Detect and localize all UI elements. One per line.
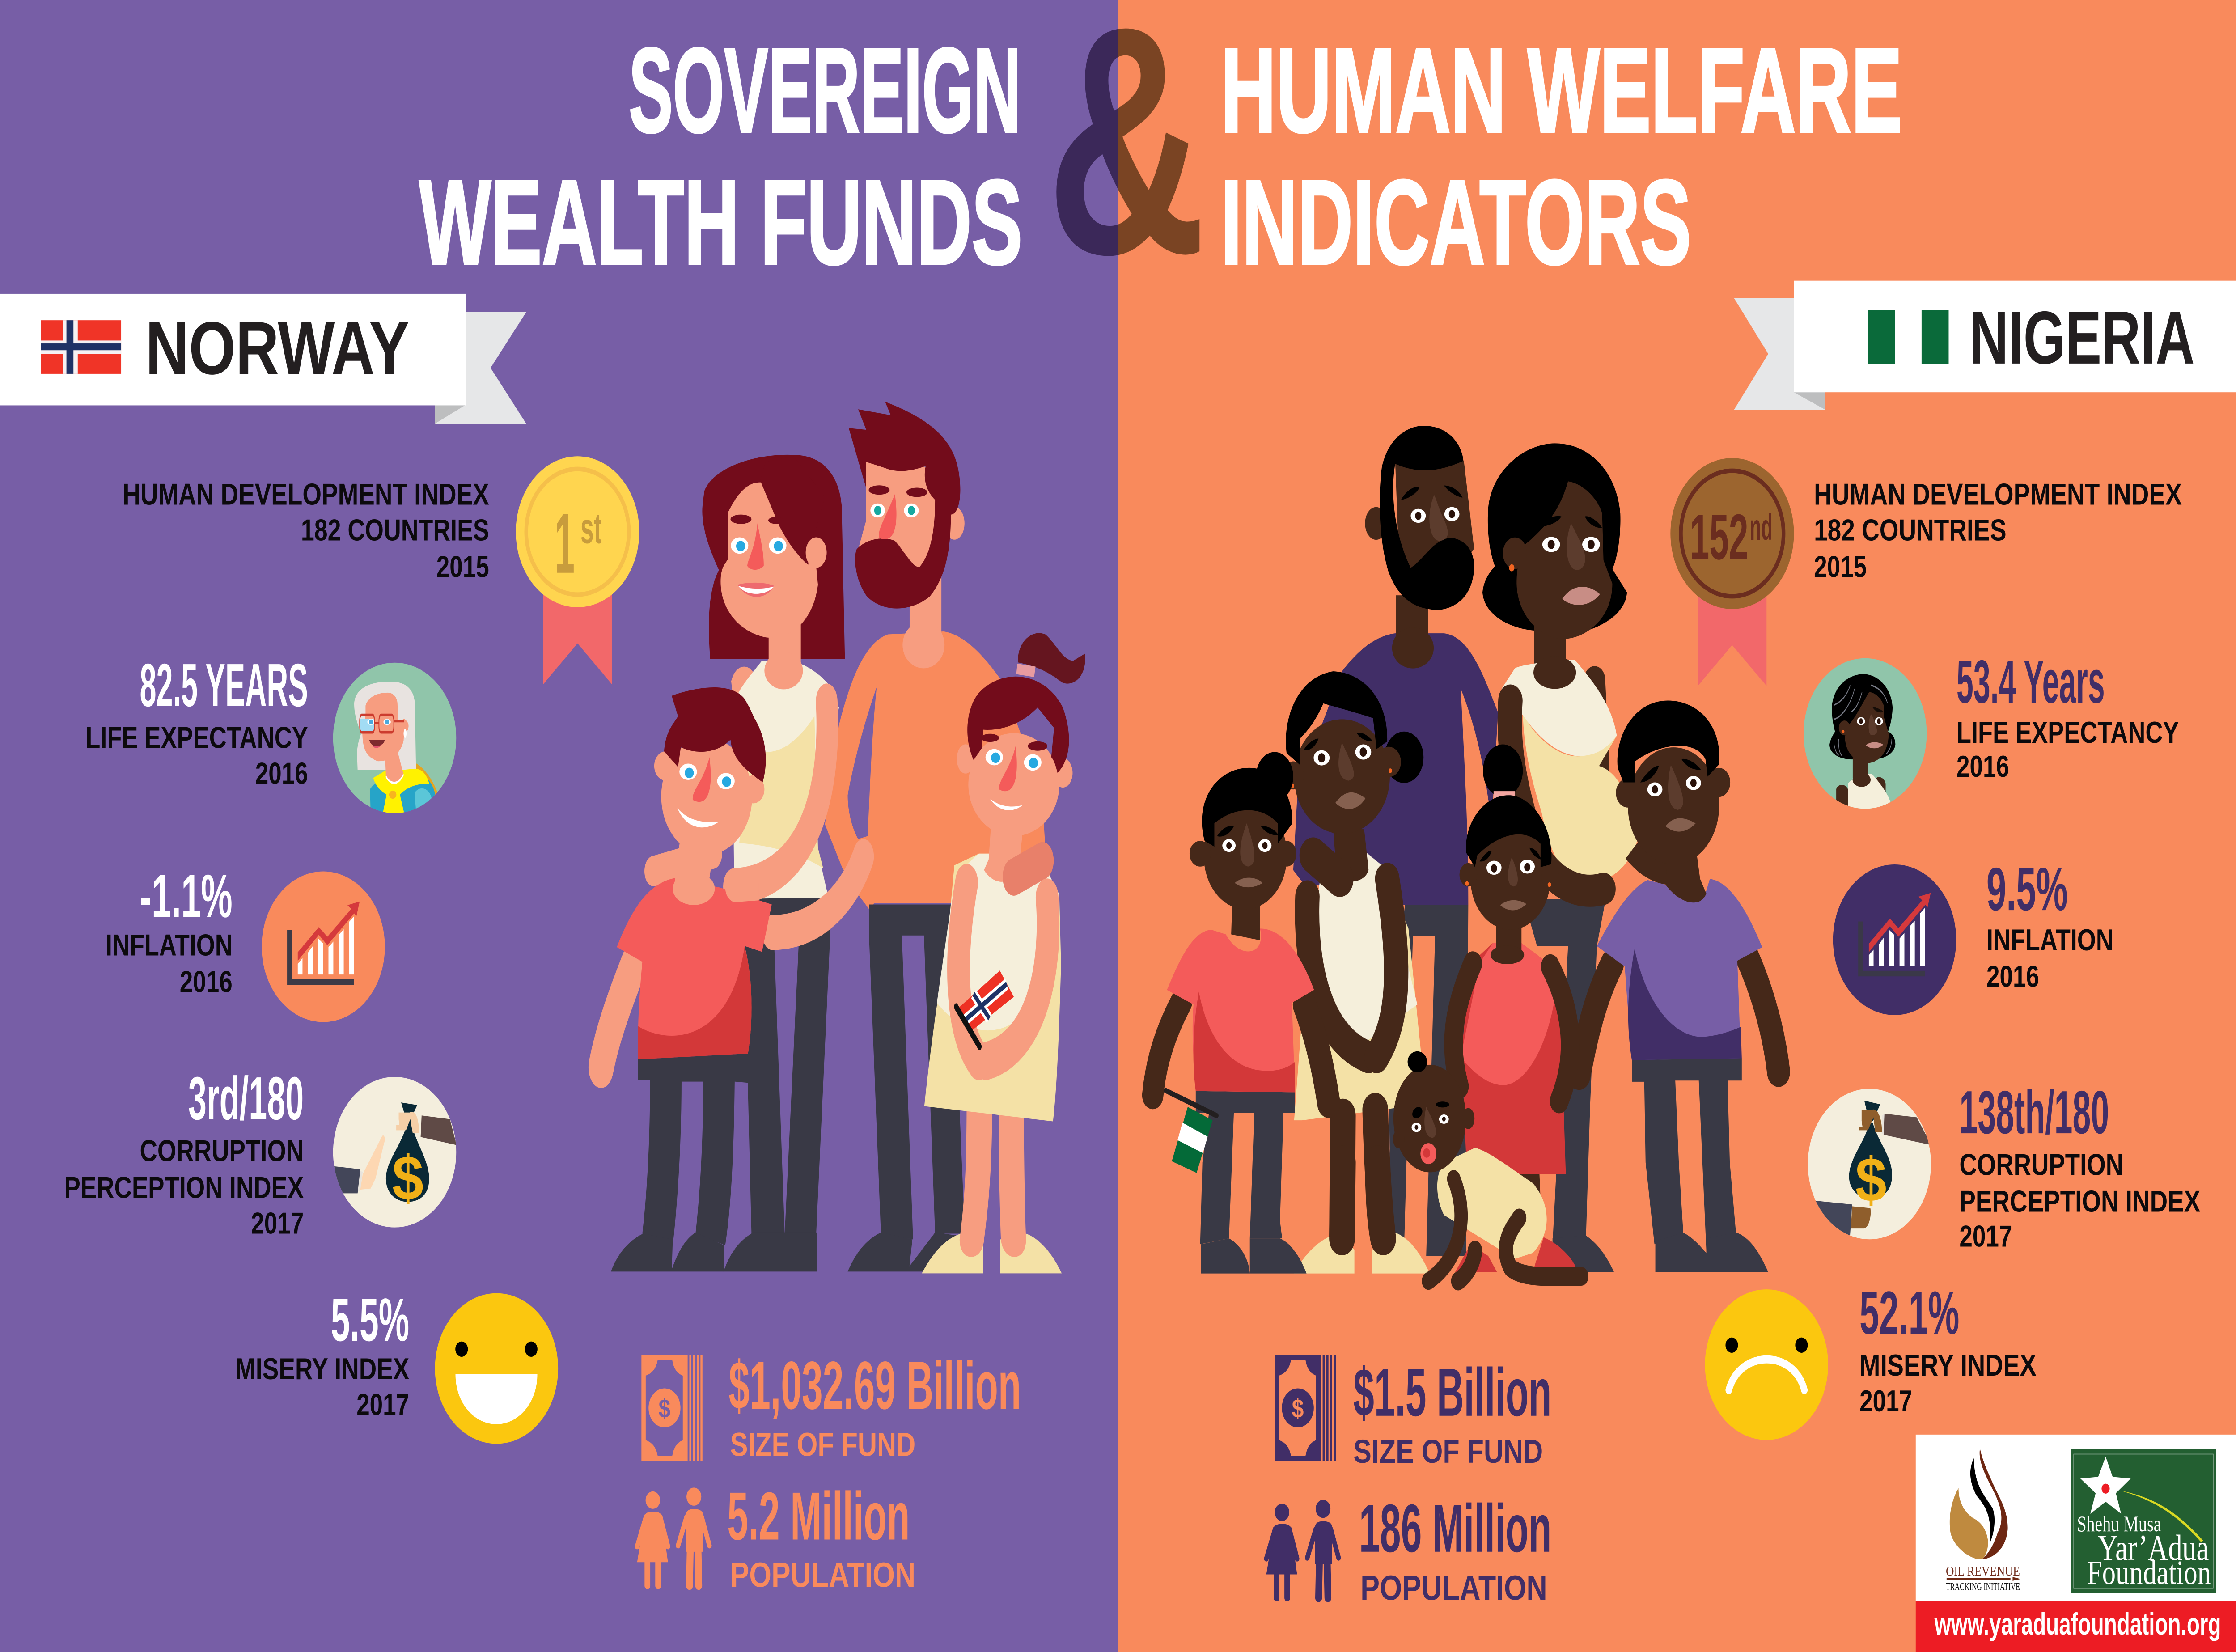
icon: banknote Nigeria: $ xyxy=(1292,1394,1304,1423)
text: Norway life expectancy: 2016 xyxy=(255,757,308,791)
text: Norway human development index: 2015 xyxy=(436,550,489,584)
icon: inflation chart Norway xyxy=(262,872,385,1022)
logo: Oil Revenue Tracking Initiative xyxy=(1946,1449,2021,1593)
panel: logos xyxy=(1916,1435,2236,1652)
illustration: Norwegian family xyxy=(601,402,1085,1273)
figure: mother xyxy=(1482,443,1637,1272)
icon: banknote Norway: $ xyxy=(659,1394,670,1423)
text: Nigeria misery index: 2017 xyxy=(1859,1385,1912,1418)
text: Nigeria misery index: 52.1% xyxy=(1859,1279,1959,1347)
logo: Shehu Musa Yar'Adua Foundation: Yar’Adua xyxy=(2098,1528,2209,1568)
icon: sad face xyxy=(1705,1289,1828,1440)
title: Human Welfare Indicators: INDICATORS xyxy=(1221,156,1691,290)
text: Nigeria inflation: 2016 xyxy=(1986,960,2039,994)
stat: Norway population xyxy=(637,1478,915,1594)
title: Human Welfare Indicators: HUMAN WELFARE xyxy=(1221,24,1902,158)
banner: Norway: NORWAY xyxy=(145,306,409,390)
stat: Norway population: POPULATION xyxy=(730,1556,915,1594)
text: Norway misery index: 2017 xyxy=(356,1388,409,1422)
text: Norway inflation xyxy=(106,862,233,999)
icon: money bag Nigeria: $ xyxy=(1855,1145,1887,1215)
title: Sovereign Wealth Funds: SOVEREIGN xyxy=(629,24,1021,158)
icon: money bag Norway xyxy=(329,1077,457,1228)
panel: Norway background xyxy=(0,0,1118,1652)
figure: younger daughter xyxy=(1453,745,1570,1221)
stat: Nigeria population: POPULATION xyxy=(1360,1569,1547,1608)
text: Norway inflation: -1.1% xyxy=(140,862,233,930)
text: Nigeria life expectancy: 2016 xyxy=(1956,750,2009,784)
icon: gold medal 1st: 1 xyxy=(555,496,575,591)
stat: Norway fund size: $1,032.69 Billion xyxy=(728,1347,1021,1423)
text: Norway corruption perception index xyxy=(64,1064,304,1241)
title: Human Welfare Indicators xyxy=(1221,24,1902,290)
text: Nigeria inflation: 9.5% xyxy=(1986,856,2068,923)
text: Nigeria corruption perception index xyxy=(1959,1079,2200,1254)
text: Norway inflation: INFLATION xyxy=(106,928,233,962)
figure: son in purple shirt xyxy=(1579,701,1779,1272)
icon: elderly woman xyxy=(333,663,456,819)
text: Norway corruption perception index: PERCEPTION INDEX xyxy=(64,1171,304,1205)
text: Nigeria misery index: MISERY INDEX xyxy=(1859,1349,2037,1382)
icon: bronze medal 152nd: 152 xyxy=(1690,501,1748,573)
icon: money bag Nigeria xyxy=(1808,1089,1931,1241)
logo: Oil Revenue Tracking Initiative: TRACKING INITIATIVE xyxy=(1946,1581,2020,1593)
icon: people Nigeria xyxy=(1266,1500,1338,1598)
icon: bronze medal 152nd xyxy=(1670,458,1794,686)
icon: gold medal 1st: st xyxy=(580,504,602,552)
figure: father xyxy=(1293,426,1498,1256)
title: Sovereign Wealth Funds: WEALTH FUNDS xyxy=(419,156,1022,290)
logo: Oil Revenue Tracking Initiative: OIL REVENUE xyxy=(1946,1564,2020,1578)
logo: Shehu Musa Yar'Adua Foundation: Shehu Musa xyxy=(2077,1511,2161,1536)
icon: people Norway xyxy=(637,1487,709,1586)
text: Nigeria human development index: 2015 xyxy=(1814,550,1867,584)
stat: Nigeria population xyxy=(1266,1491,1551,1608)
text: Nigeria inflation: INFLATION xyxy=(1986,923,2113,957)
figure: girl with flag xyxy=(922,633,1085,1273)
figure: boy xyxy=(601,687,864,1271)
text: Norway human development index: HUMAN DEVELOPMENT INDEX xyxy=(123,478,489,512)
text: Norway corruption perception index: 2017 xyxy=(251,1207,304,1241)
text: Nigeria human development index xyxy=(1814,478,2182,584)
text: Norway corruption perception index: CORRUPTION xyxy=(140,1134,304,1168)
figure: crawling baby xyxy=(1393,1051,1581,1281)
text: Norway life expectancy: 82.5 YEARS xyxy=(140,651,308,720)
title: Sovereign Wealth Funds xyxy=(419,24,1022,290)
icon: banknote Norway xyxy=(641,1355,703,1461)
text: Nigeria life expectancy: 53.4 Years xyxy=(1956,648,2105,716)
text: Nigeria inflation xyxy=(1986,856,2113,994)
stat: Nigeria fund size xyxy=(1275,1355,1551,1470)
figure: mother xyxy=(702,455,845,1271)
text: Nigeria human development index: 182 COUNTRIES xyxy=(1814,513,2007,547)
text: Nigeria life expectancy xyxy=(1956,648,2179,784)
text: Norway life expectancy xyxy=(85,651,308,791)
text: Norway corruption perception index: 3rd/180 xyxy=(188,1064,304,1133)
text: Norway misery index: 5.5% xyxy=(331,1286,409,1354)
text: Nigeria corruption perception index: 138th/180 xyxy=(1959,1079,2109,1147)
stat: Norway fund size: SIZE OF FUND xyxy=(730,1427,915,1463)
stat: Norway fund size xyxy=(641,1347,1021,1463)
icon: small Norway flag xyxy=(956,970,1014,1046)
text: Nigeria corruption perception index: 2017 xyxy=(1959,1220,2012,1254)
text: Norway misery index xyxy=(235,1286,409,1422)
text: Nigeria corruption perception index: CORRUPTION xyxy=(1959,1148,2123,1182)
panel: Nigeria background xyxy=(1118,0,2236,1652)
icon: smiling face xyxy=(435,1293,558,1444)
icon: Nigeria flag xyxy=(1868,310,1948,364)
icon: bronze medal 152nd: nd xyxy=(1750,507,1773,548)
stat: Nigeria fund size: $1.5 Billion xyxy=(1353,1355,1551,1431)
icon: banknote Nigeria xyxy=(1275,1355,1336,1461)
icon: money bag Norway: $ xyxy=(392,1143,423,1213)
figure: father xyxy=(825,402,1045,1271)
logo: Shehu Musa Yar'Adua Foundation: Foundation xyxy=(2087,1554,2211,1592)
stat: Norway population: 5.2 Million xyxy=(727,1478,910,1554)
icon: inflation chart Nigeria xyxy=(1833,864,1956,1015)
text: Norway misery index: MISERY INDEX xyxy=(235,1352,409,1386)
banner: Nigeria: NIGERIA xyxy=(1969,296,2195,380)
text: Norway life expectancy: LIFE EXPECTANCY xyxy=(85,721,308,755)
banner: Norway xyxy=(0,294,526,424)
icon: small Nigeria flag xyxy=(1165,1090,1216,1173)
text: Norway human development index xyxy=(123,478,489,584)
text: Nigeria human development index: HUMAN DEVELOPMENT INDEX xyxy=(1814,478,2182,512)
footer: website xyxy=(1916,1601,2236,1652)
text: Norway inflation: 2016 xyxy=(180,965,233,999)
logo: Shehu Musa Yar'Adua Foundation xyxy=(2071,1449,2216,1593)
icon: gold medal 1st xyxy=(516,456,639,684)
icon: Nigerian woman xyxy=(1804,658,1927,815)
stat: Nigeria fund size: SIZE OF FUND xyxy=(1353,1433,1543,1470)
text: Nigeria life expectancy: LIFE EXPECTANCY xyxy=(1956,716,2179,750)
text: Nigeria misery index xyxy=(1859,1279,2037,1418)
text: Norway human development index: 182 COUNTRIES xyxy=(301,513,489,547)
figure: tall daughter xyxy=(1283,671,1430,1274)
title: ampersand xyxy=(1056,29,1199,256)
stat: Nigeria population: 186 Million xyxy=(1359,1491,1551,1567)
figure: son in coral shirt with flag xyxy=(1153,752,1329,1274)
illustration: Nigerian family xyxy=(1153,426,1779,1281)
icon: Norway flag xyxy=(41,320,121,374)
banner: Nigeria xyxy=(1734,281,2236,410)
text: Nigeria corruption perception index: PERCEPTION INDEX xyxy=(1959,1185,2200,1219)
